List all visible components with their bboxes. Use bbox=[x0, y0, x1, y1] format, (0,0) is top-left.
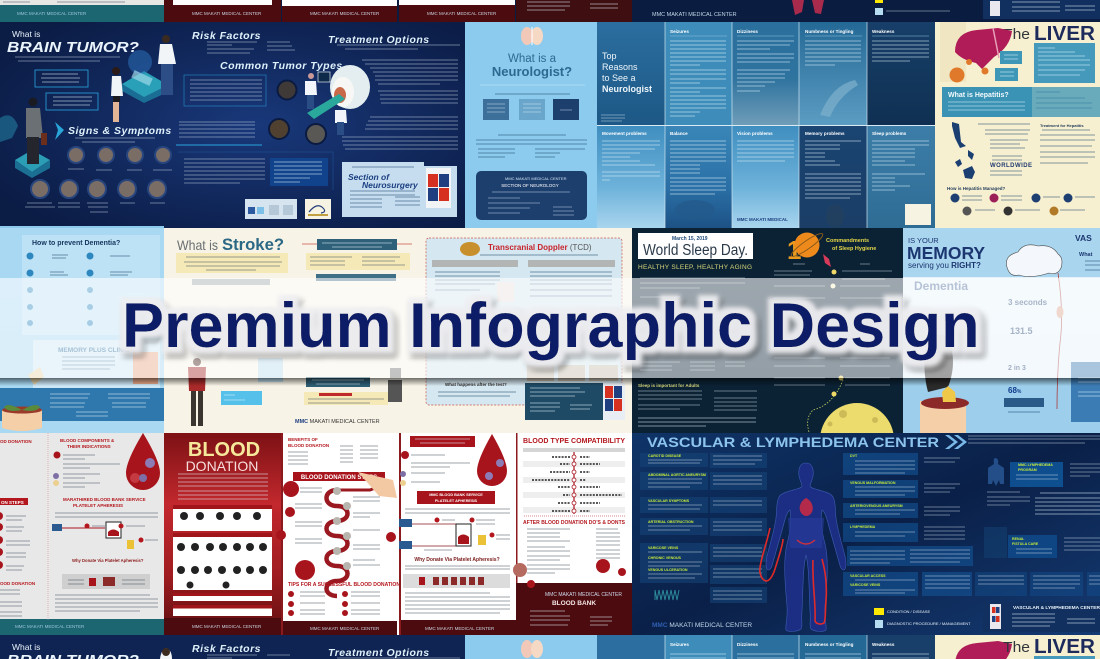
heading: why donate: Why Donate Via Platelet Apheresis? bbox=[414, 557, 500, 563]
column: arterial conditions: VENOUS MALFORMATION bbox=[850, 481, 896, 485]
grid cell: balance: Balance bbox=[670, 131, 688, 136]
heading bar bbox=[0, 498, 28, 505]
title fragment: vascular bbox=[1075, 233, 1100, 270]
heading: benefits bbox=[288, 437, 329, 448]
text block: sleep requirements bbox=[638, 383, 757, 426]
yellow list box bbox=[306, 253, 410, 270]
column: lymphedema program: FISTULA CARE bbox=[1012, 542, 1039, 546]
panel: section contact: MMC MAKATI MEDICAL CENTER bbox=[505, 176, 567, 181]
chart: waveform bbox=[655, 590, 679, 600]
grid cell: memory problems bbox=[799, 126, 867, 228]
panel: stroke and TCD: What happens after the test? bbox=[445, 382, 507, 387]
legend: DIAGNOSTIC PROCEDURE / MANAGEMENT bbox=[887, 621, 971, 626]
photo strip bbox=[527, 365, 618, 381]
logo: MMC MAKATI MEDICAL CENTER bbox=[310, 626, 380, 631]
diagram: apheresis bbox=[52, 522, 158, 549]
components list bbox=[53, 452, 120, 487]
panel: donation steps bbox=[276, 433, 400, 635]
lower boxes bbox=[975, 572, 1100, 596]
logo box bbox=[305, 199, 331, 219]
grid cell: vision problems: Vision problems bbox=[737, 131, 773, 136]
panel: section of neurosurgery bbox=[342, 162, 457, 217]
panel: top reasons to see a neurologist: to See a bbox=[602, 73, 636, 83]
grid cell: weakness: Weakness bbox=[872, 29, 895, 34]
logo: makati medical center: MMC MAKATI MEDICAL CENTER bbox=[295, 419, 380, 425]
grid cell: dizziness: Dizziness bbox=[737, 29, 758, 34]
panel: blood components bbox=[0, 433, 164, 635]
logo box: world sleep day: March 15, 2019 bbox=[672, 236, 708, 242]
column: arterial conditions: ARTERIOVENOUS ANEURYSM bbox=[850, 504, 903, 508]
panel: what is hepatitis bbox=[942, 87, 1100, 117]
chevrons bbox=[945, 435, 967, 449]
panel: platelet apheresis bbox=[399, 433, 516, 635]
legend: CONDITION / DISEASE bbox=[887, 609, 930, 614]
title: VASCULAR & LYMPHEDEMA CENTER bbox=[647, 435, 939, 450]
callout: time bbox=[221, 391, 262, 405]
panel: what is a neurologist bbox=[467, 22, 597, 228]
heading: What is a bbox=[508, 53, 557, 65]
top strip: footers of repeated row: MMC MAKATI MEDICAL CENTER bbox=[310, 11, 380, 16]
title: IS YOUR bbox=[908, 236, 939, 245]
heading bar bbox=[293, 472, 385, 481]
illustration: brain bbox=[1006, 245, 1062, 277]
column: venous conditions: CHRONIC VENOUS bbox=[648, 556, 682, 560]
illustration: MRI machine bbox=[305, 65, 370, 135]
bottom strip: repeated top of row: The bbox=[1003, 639, 1030, 656]
grid cell: memory problems: Memory problems bbox=[805, 131, 845, 136]
blue note bbox=[258, 358, 283, 382]
banner: translucent band bbox=[0, 278, 1100, 386]
bottom strip: repeated top of row: Treatment Options bbox=[328, 647, 430, 659]
panel: blood type compatibility bbox=[513, 433, 632, 635]
heading: PLATELET APHERESIS bbox=[73, 503, 123, 508]
title: the liver: The bbox=[1003, 26, 1030, 43]
title bbox=[907, 236, 985, 270]
title fragment: vascular: VAS bbox=[1075, 233, 1092, 243]
specialty boxes bbox=[483, 99, 579, 120]
column: venous conditions: VENOUS ULCERATION bbox=[648, 568, 688, 572]
panel: transcranial doppler: Transcranial Doppler (TCD) bbox=[488, 243, 592, 252]
panel: the liver bbox=[935, 22, 1100, 228]
title: the liver: LIVER bbox=[1034, 22, 1095, 45]
grid cell: numbness bbox=[799, 22, 867, 125]
symptom icons bbox=[31, 147, 171, 198]
logo: MMC MAKATI MEDICAL CENTER bbox=[192, 624, 262, 629]
illustration: head with plant bbox=[2, 367, 44, 431]
top strip: footers of repeated row: MMC MAKATI MEDICAL CENTER bbox=[427, 11, 497, 16]
column: arterial conditions: DVT bbox=[850, 454, 858, 458]
tagline: HEALTHY SLEEP, HEALTHY AGING bbox=[638, 264, 752, 271]
social icons box bbox=[245, 199, 297, 219]
panel: blue box bbox=[1071, 362, 1100, 422]
column: arterial conditions: VARICOSE VEINS bbox=[850, 583, 881, 587]
icon: TCD machine bbox=[388, 368, 402, 402]
panel: world sleep day bbox=[632, 228, 903, 477]
column: venous conditions: VASCULAR SYMPTOMS bbox=[648, 499, 690, 503]
grid cell: seizures: Seizures bbox=[670, 29, 689, 34]
logo and bank: BLOOD BANK bbox=[552, 600, 596, 607]
grid cell: weakness bbox=[867, 22, 935, 125]
heading: benefits: BENEFITS OF bbox=[288, 437, 318, 442]
title: serving you RIGHT? bbox=[908, 261, 981, 270]
bottom strip: repeated top of row: Weakness bbox=[872, 642, 895, 647]
hepatitis prevention icons bbox=[947, 186, 1095, 216]
panel: is your memory serving you right bbox=[903, 228, 1100, 433]
panel: top reasons to see a neurologist: Top bbox=[602, 51, 617, 61]
panel: top reasons to see a neurologist: Reasons bbox=[602, 62, 638, 72]
heading bbox=[492, 53, 572, 79]
column: lymphedema program: PROGRAM bbox=[1018, 468, 1037, 472]
column: venous conditions: CAROTID DISEASE bbox=[648, 454, 682, 458]
grid cell: balance bbox=[665, 126, 732, 228]
title: what is stroke: What is bbox=[177, 237, 218, 253]
diagram: apheresis bbox=[399, 518, 510, 550]
header: how is stroke treated bbox=[306, 377, 370, 387]
illustration: moon bbox=[820, 403, 894, 477]
column: lymphedema program bbox=[984, 458, 1100, 558]
heading: MARATHIRED BLOOD BANK SERVICE bbox=[63, 497, 146, 502]
illustration: human body bbox=[760, 463, 846, 631]
grid cell: numbness: Numbness or Tingling bbox=[805, 29, 854, 34]
bottom strip: repeated top of row: Risk Factors bbox=[192, 643, 261, 655]
text block: hepatitis facts bbox=[978, 124, 1095, 163]
component list bbox=[400, 451, 470, 486]
grid cell: vision problems bbox=[732, 126, 799, 228]
grid cell: sleep problems bbox=[867, 126, 935, 228]
statistics: 3 seconds bbox=[1008, 298, 1048, 307]
panel: center contact: VASCULAR & LYMPHEDEMA CENTER bbox=[1013, 605, 1100, 611]
illustration: man on platform bbox=[0, 98, 64, 178]
illustration: man in red bbox=[188, 358, 206, 426]
top strip: footers of repeated row: MMC MAKATI MEDICAL CENTER bbox=[17, 11, 87, 16]
heading: BLOOD COMPONENTS & bbox=[60, 438, 115, 443]
column: venous conditions bbox=[640, 453, 767, 603]
illustration: head with lightbulb bbox=[920, 335, 969, 433]
box: memory plus clinic: MEMORY PLUS CLINIC bbox=[58, 347, 130, 354]
title: the liver bbox=[1003, 26, 1094, 40]
column: venous conditions: VARICOSE VEINS bbox=[648, 546, 679, 550]
icon: brain bbox=[521, 27, 543, 45]
map: philippines bbox=[952, 122, 975, 179]
blood cells bbox=[513, 559, 626, 588]
text block: doctors bbox=[50, 394, 150, 416]
title: what is stroke bbox=[177, 236, 284, 254]
icon: blood drop bbox=[126, 433, 160, 490]
donation steps icons bbox=[0, 512, 3, 569]
header: common risk factors bbox=[302, 239, 412, 250]
bottom strip: repeated top of row: What is bbox=[12, 642, 40, 652]
heading bar: BLOOD DONATION STEPS bbox=[301, 475, 377, 481]
heading: BLOOD TYPE COMPATIBILITY bbox=[523, 438, 625, 445]
bottom strip: repeated top of row: Dizziness bbox=[737, 642, 758, 647]
title: DONATION bbox=[186, 458, 258, 474]
legend bbox=[874, 608, 971, 628]
title: BLOOD bbox=[188, 439, 260, 461]
panel: top reasons to see a neurologist: Neurologist bbox=[602, 84, 652, 94]
icon: blood drop bbox=[477, 434, 507, 486]
title bbox=[186, 439, 260, 474]
heading bar: ON STEPS bbox=[1, 500, 24, 505]
heading: OOD DONATION bbox=[0, 581, 35, 586]
bottom strip: repeated top of row: Seizures bbox=[670, 642, 689, 647]
bottom strip: repeated top of row: LIVER bbox=[1034, 635, 1095, 658]
title: 10 commandments: 1 bbox=[787, 235, 801, 265]
title: brain tumor: BRAIN TUMOR? bbox=[7, 39, 139, 56]
statistics: 131.5 bbox=[1010, 326, 1033, 336]
title: premium infographic design: Premium Infographic Design bbox=[122, 291, 980, 361]
panel: brain tumor bbox=[0, 22, 469, 229]
top strip: footers of repeated row bbox=[0, 0, 1100, 22]
panel: top reasons to see a neurologist bbox=[597, 22, 935, 125]
column: venous conditions: ABDOMINAL AORTIC ANEURYSM bbox=[648, 473, 706, 477]
top strip: footers of repeated row: MMC MAKATI MEDICAL CENTER bbox=[652, 12, 737, 18]
how often sections bbox=[173, 593, 272, 616]
panel: section contact: SECTION OF NEUROLOGY bbox=[501, 183, 559, 188]
heading: OD DONATION bbox=[0, 439, 32, 444]
bottom strip: repeated top of row: Numbness or Tingling bbox=[805, 642, 854, 647]
heading: How to prevent Dementia? bbox=[32, 240, 120, 247]
heading: benefits: BLOOD DONATION bbox=[288, 443, 329, 448]
text block: sleep requirements: Sleep is important for Adults bbox=[638, 383, 700, 388]
logo box: world sleep day: World Sleep Day. bbox=[643, 242, 748, 259]
compatibility table bbox=[523, 448, 625, 514]
platelet comparison bar bbox=[62, 574, 150, 589]
column: arterial conditions: VASCULAR ACCESS bbox=[850, 574, 886, 578]
callout boxes bbox=[35, 70, 98, 110]
panel: stroke and TCD bbox=[164, 228, 632, 433]
illustration: isometric tree platform and doctors bbox=[111, 35, 176, 122]
column: arterial conditions: LYMPHEDEMA bbox=[850, 525, 876, 529]
column: arterial conditions bbox=[843, 453, 973, 596]
heading: Why Donate Via Platelet Apheresis? bbox=[72, 558, 144, 563]
heading bbox=[0, 438, 146, 586]
panel: center contact bbox=[983, 602, 1100, 632]
heading bar bbox=[417, 491, 495, 504]
panel: transcranial doppler bbox=[426, 238, 622, 405]
bottom strip: repeated top of row bbox=[0, 635, 1100, 659]
panel: section contact bbox=[476, 171, 587, 220]
top strip: footers of repeated row: MMC MAKATI MEDICAL CENTER bbox=[192, 11, 262, 16]
heading: common tumor types: Common Tumor Types bbox=[220, 60, 343, 72]
panel: the liver: WORLDWIDE bbox=[990, 163, 1032, 169]
title: 10 commandments bbox=[787, 231, 876, 265]
column: lymphedema program: MMC LYMPHEDEMA bbox=[1018, 463, 1053, 467]
heading: signs and symptoms: Signs & Symptoms bbox=[68, 125, 172, 137]
heading: THEIR INDICATIONS bbox=[67, 444, 111, 449]
icon: rocket bbox=[823, 254, 831, 267]
title: 10 commandments: of Sleep Hygiene bbox=[832, 246, 876, 252]
column: lymphedema program: RENAL bbox=[1012, 537, 1025, 541]
heading bar: MMC BLOOD BANK SERVICE bbox=[429, 493, 483, 497]
path dots and dashes bbox=[808, 380, 843, 432]
panel: dementia prevention bbox=[0, 228, 164, 433]
grid cell: vision problems: MMC MAKATI MEDICAL bbox=[737, 217, 788, 222]
logo: MMC MAKATI MEDICAL CENTER bbox=[15, 624, 85, 629]
blood cell decorations bbox=[276, 481, 396, 580]
panel: section of neurosurgery: Neurosurgery bbox=[362, 180, 419, 190]
statistics bbox=[1004, 298, 1048, 412]
statistics: 68% bbox=[1008, 386, 1022, 395]
panel: section of neurosurgery: Section of bbox=[348, 172, 390, 182]
box: memory plus clinic bbox=[33, 340, 160, 388]
panel: what is hepatitis: What is Hepatitis? bbox=[948, 92, 1009, 99]
heading: dementia: Dementia bbox=[914, 279, 968, 293]
callouts bbox=[995, 43, 1095, 83]
illustration: liver and virus bbox=[950, 28, 1012, 82]
text block: glioma bbox=[184, 75, 266, 106]
logo: MMC MAKATI MEDICAL CENTER bbox=[425, 626, 495, 631]
who cannot donate section bbox=[173, 533, 272, 590]
heading bar: PLATELET APHERESIS bbox=[435, 499, 478, 503]
text block: diagnosis and box bbox=[178, 152, 333, 190]
scans bbox=[269, 80, 326, 144]
grid cell: movement problems bbox=[597, 126, 665, 228]
logo box: world sleep day bbox=[638, 233, 753, 259]
panel: vascular and lymphedema center bbox=[632, 433, 1100, 635]
logo and bank: MMC MAKATI MEDICAL CENTER bbox=[545, 592, 622, 598]
title: 10 commandments: Commandments bbox=[826, 238, 869, 244]
logo: MMC MAKATI MEDICAL CENTER bbox=[652, 622, 752, 629]
title: MEMORY bbox=[907, 243, 985, 263]
title: brain tumor bbox=[7, 31, 139, 52]
logo and bank bbox=[530, 592, 622, 625]
grid cell: dizziness bbox=[732, 22, 799, 125]
grid cell: movement problems: Movement problems bbox=[602, 131, 647, 136]
statistics: 2 in 3 bbox=[1008, 365, 1026, 372]
yellow text bbox=[304, 392, 388, 405]
text block: neurology section bbox=[476, 135, 587, 157]
who can donate section bbox=[173, 505, 272, 531]
heading: tips: TIPS FOR A SUCCESSFUL BLOOD DONATION bbox=[288, 582, 400, 588]
panel: the liver: Treatment for Hepatitis bbox=[1040, 123, 1084, 128]
heading: treatment options: Treatment Options bbox=[328, 34, 430, 46]
panel: blood donation poster bbox=[164, 433, 281, 635]
text block: treatments bbox=[342, 60, 458, 149]
comparison bar bbox=[403, 574, 510, 588]
hepatitis prevention icons: How is Hepatitis Managed? bbox=[947, 186, 1006, 191]
heading: after donation: AFTER BLOOD DONATION DO'S & DONTS bbox=[523, 520, 626, 526]
panel: laboratory of neuroscience bbox=[525, 383, 625, 420]
flowchart: winding donation tube bbox=[326, 472, 397, 596]
title fragment: vascular: What bbox=[1079, 252, 1093, 258]
grid cell: seizures bbox=[665, 22, 732, 125]
grid cell: sleep problems: Sleep problems bbox=[872, 131, 907, 136]
text box bbox=[176, 253, 288, 273]
text block: meningioma bbox=[176, 122, 262, 145]
title: what is stroke: Stroke? bbox=[222, 236, 284, 254]
title: brain tumor: What is bbox=[12, 29, 40, 39]
heading: risk factors: Risk Factors bbox=[192, 30, 261, 42]
heading: Neurologist? bbox=[492, 64, 572, 79]
prevention steps bbox=[26, 252, 94, 326]
heading box bbox=[410, 436, 475, 447]
column: venous conditions: ARTERIAL OBSTRUCTION bbox=[648, 520, 694, 524]
